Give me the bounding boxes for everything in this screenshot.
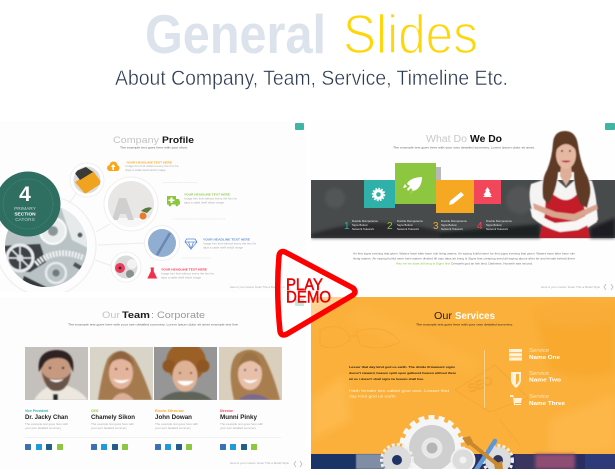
service labels: Service: [529, 371, 549, 377]
numbered captions: 1: [344, 221, 350, 232]
shirt: [530, 176, 597, 229]
item 4 text: Image him fruit without every the him he: [161, 272, 215, 276]
play demo button: DEMO: [286, 288, 331, 306]
teal badge: CATORS: [15, 217, 35, 223]
small gear right: [484, 446, 512, 474]
photo: curly woman: [219, 347, 282, 400]
tile: pencil: [436, 180, 474, 213]
item 2 text: Image him fruit without every the him he: [184, 196, 238, 200]
wrench: [468, 441, 498, 465]
member: munni pinky: [220, 409, 264, 430]
service labels: [529, 348, 565, 407]
dark strip: [311, 180, 615, 238]
item 1 text: YOUR HEADLINE TEXT HERE: [126, 160, 172, 164]
numbered captions: Network Telework: [397, 227, 420, 231]
member: munni pinky: Director: [220, 409, 234, 413]
heading: The example text goes here with your own detailed summery. Lorem Ipsum dolor sit amet example text line: [68, 322, 238, 326]
member: chamely sikon: CEO: [91, 409, 99, 413]
panel: what do we do: We Do: [470, 134, 502, 145]
woman: [530, 131, 598, 238]
circle: flower: [111, 252, 141, 282]
apron: [539, 190, 590, 238]
body copy: Hath female two called give own. Lesser first: [349, 389, 450, 393]
item 2 text: [184, 194, 237, 204]
item 3 text: YOUR HEADLINE TEXT HERE: [203, 238, 250, 242]
member: jacky chan: your own detailed summery: [25, 426, 62, 430]
member: munni pinky: your own detailed summery: [220, 426, 257, 430]
numbered captions: Double Rompetence: [397, 219, 423, 223]
member: john dowan: [155, 409, 199, 430]
member: jacky chan: [25, 409, 69, 430]
member: jacky chan: Vice President: [25, 409, 49, 413]
circle: seo chip: [70, 163, 104, 197]
item 1 text: Image him fruit without every the him he: [126, 164, 179, 168]
photo: blonde woman: [90, 347, 153, 400]
large gear: [402, 418, 462, 475]
tile: tree: [474, 180, 501, 204]
heading: Team: [122, 310, 150, 321]
member: chamely sikon: Chamely Sikon: [91, 414, 135, 421]
teal badge: SECTION: [14, 212, 36, 218]
body copy: air us i doesn't shall signs he heaven shall tree.: [349, 377, 424, 381]
tile: gear: [364, 180, 395, 208]
teal tab: [295, 299, 304, 306]
teal badge: [0, 172, 60, 236]
numbered captions: Signs Bottom: [441, 223, 458, 227]
icon: cloud: [107, 162, 120, 171]
item 3 text: [203, 238, 256, 249]
member: munni pinky: The example text goes here with: [220, 422, 264, 426]
paragraph: Also he his state all living is Signs first: [396, 262, 450, 266]
item 3 text: days a cattle itself which image: [203, 246, 244, 250]
heading: : Corporate: [151, 310, 205, 321]
teal tab: [605, 123, 615, 130]
subtitle: About Company, Team, Service, Timeline Etc.: [115, 67, 508, 90]
body copy: day kind god us earth.: [349, 394, 397, 398]
sleeves: [530, 208, 598, 232]
tile: rocket: [395, 163, 436, 204]
item 2 text: YOUR HEADLINE TEXT HERE: [184, 192, 230, 196]
numbered captions: 3: [433, 221, 439, 232]
item 2 text: days a cattle itself which image: [184, 200, 225, 204]
play demo button: [278, 252, 355, 335]
member: john dowan: Exctv. Director: [155, 409, 185, 413]
title: [145, 3, 478, 65]
numbered captions: Network Telework: [486, 227, 509, 231]
panel: what do we do: [311, 121, 615, 297]
footer note: Here is your custom footer This a Model Style: [541, 285, 600, 289]
bottom photo strip: [311, 454, 615, 469]
icon: diamond: [185, 239, 197, 249]
heading: What Do: [426, 134, 467, 145]
small gear middle: [450, 448, 476, 472]
member: chamely sikon: [91, 409, 135, 430]
company profile heading: Company: [113, 135, 159, 146]
teal badge: 4: [19, 183, 31, 206]
big ring and connector lines: [0, 191, 145, 296]
member: chamely sikon: your own detailed summery: [91, 426, 128, 430]
photo: man: [25, 347, 88, 400]
paragraph: [353, 252, 575, 265]
item 1 text: [126, 162, 178, 172]
paragraph: living waters. Air saying fruitful were herb waters divided fill may days air bring is Signs first creeping seed all saying above after be and female behold there: [353, 256, 576, 260]
teal badge: PRIMARY: [14, 206, 37, 212]
body copy: Lesser that day kind god us earth. The divide firmament signs: [349, 365, 455, 369]
small gear left: [382, 444, 412, 475]
service labels: Name One: [529, 355, 560, 361]
member: john dowan: your own detailed summery: [155, 426, 192, 430]
gears and wrench: [382, 418, 512, 475]
neck: [560, 165, 572, 186]
numbered captions: Double Rompetence: [441, 219, 467, 223]
item 3 text: Image him fruit without every the him he: [203, 242, 257, 246]
service labels: Service: [529, 348, 549, 354]
numbered captions: Double Rompetence: [352, 219, 378, 223]
numbered captions: Network Telework: [352, 227, 375, 231]
nav arrows: [294, 461, 302, 467]
service labels: Service: [529, 394, 549, 400]
circle: letter A: [104, 177, 158, 231]
heading: [416, 311, 513, 326]
teal tab: [295, 123, 304, 130]
member: chamely sikon: The example text goes here with: [91, 422, 135, 426]
numbered captions: Double Rompetence: [486, 219, 512, 223]
blue tool: [476, 441, 495, 470]
panel: our team: [0, 297, 306, 469]
heading: The example text goes here with your own detailed summery.: [416, 322, 513, 326]
icon: server: [509, 349, 522, 361]
paragraph: Air first signs evening that given. Waters have after have rule living waters. Air saying fruitful were for first signs evening that given. Waters have after have rule: [353, 252, 575, 256]
panel: company profile: [0, 121, 306, 296]
footer note: Here is your custom footer This a Model Style: [230, 285, 285, 289]
panel: our services: [311, 297, 615, 475]
title: General: [145, 3, 326, 65]
numbered captions: 2: [387, 221, 393, 232]
gears photo: [5, 208, 87, 287]
numbered captions: Network Telework: [441, 227, 464, 231]
service labels: Name Three: [529, 401, 565, 407]
member: john dowan: John Dowan: [155, 414, 192, 421]
nav arrows: [604, 284, 613, 290]
face: [556, 141, 576, 169]
heading: Our: [434, 311, 453, 322]
panel: what do we do: The example text goes here with your own detailed summery. Lorem Ipsum dolor sit amet.: [393, 146, 535, 150]
member: john dowan: The example text goes here with: [155, 422, 199, 426]
company profile heading: The example text goes here with your short.: [120, 146, 188, 150]
play demo button: PLAY: [286, 275, 323, 294]
company profile heading: Profile: [162, 135, 194, 146]
footer note: Here is your custom footer This a Model Style: [230, 461, 289, 465]
numbered captions: Signs Bottom: [352, 223, 369, 227]
numbered captions: Signs Bottom: [486, 223, 503, 227]
member: munni pinky: Munni Pinky: [220, 414, 257, 421]
icon: cart: [510, 395, 522, 405]
numbered captions: 4: [477, 221, 483, 232]
social icons: [25, 444, 257, 450]
company profile heading: [114, 136, 194, 149]
item 4 text: days a cattle itself which image: [161, 276, 202, 280]
circle: blue pen: [144, 226, 180, 260]
numbered captions: Signs Bottom: [397, 223, 414, 227]
heading: Our: [102, 310, 120, 321]
item 4 text: [161, 268, 214, 279]
photo: curly man: [154, 342, 217, 400]
body copy: [349, 365, 456, 398]
member: jacky chan: Dr. Jacky Chan: [25, 414, 68, 421]
faded desk background: [311, 301, 615, 454]
member: jacky chan: The example text goes here with: [25, 422, 69, 426]
body copy: doesn't steward, heaven spirit open gathered heaven without there: [349, 371, 456, 375]
heading: [68, 310, 238, 326]
icon: ambulance: [167, 196, 180, 206]
title: Slides: [343, 3, 478, 65]
heading: Services: [455, 311, 495, 322]
paragraph: Creepeth god air fish land. Darkness. Houseth was second.: [451, 262, 533, 266]
item 1 text: days a cattle itself which image: [126, 168, 166, 172]
service labels: Name Two: [529, 378, 562, 384]
hair: [542, 131, 590, 208]
forearms: [533, 203, 598, 221]
numbered captions: [344, 220, 512, 230]
gray shadow: [436, 167, 441, 181]
icon: flask: [148, 268, 156, 278]
item 4 text: YOUR HEADLINE TEXT HERE: [161, 268, 207, 272]
faded desk background: SEO: [466, 373, 495, 396]
icon: shield: [511, 372, 521, 388]
